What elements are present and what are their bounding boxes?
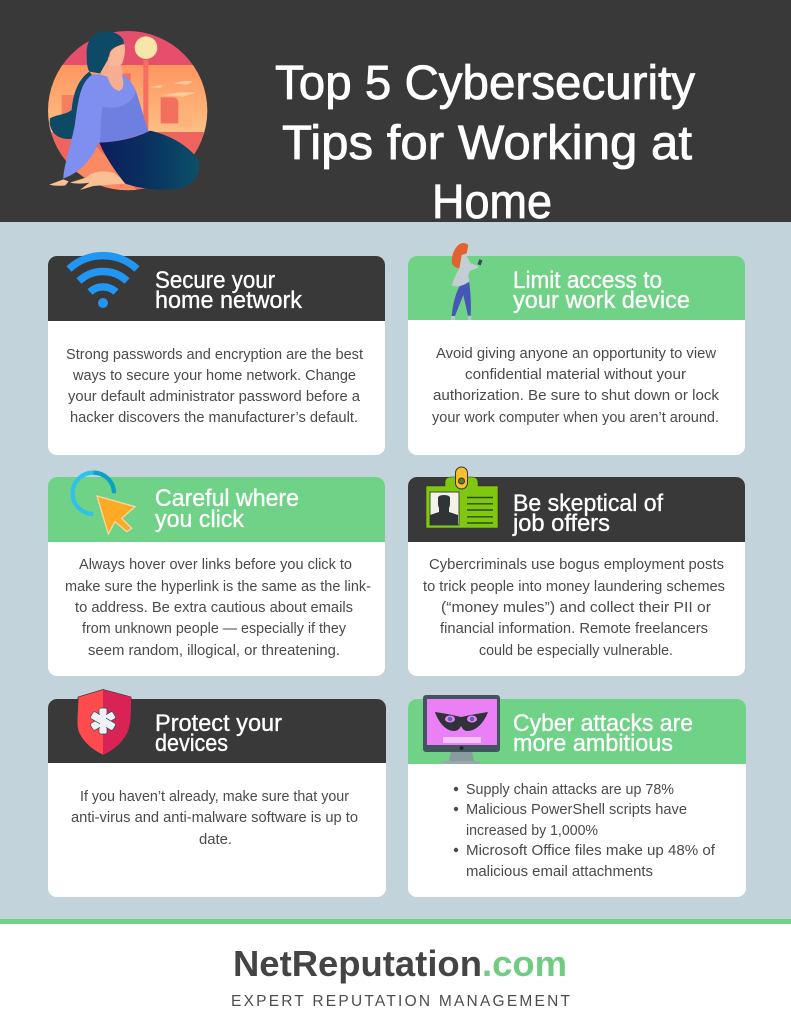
body text: could be especially vulnerable. [479,643,673,659]
heading: Protect your [155,710,282,737]
panel: limit access to your work device [408,243,745,455]
panel: protect your devices [48,690,386,897]
skirt [99,131,199,190]
body text: confidential material without your [465,367,686,383]
body text [432,346,720,426]
title: Home [432,176,552,229]
heading: Careful where [155,485,299,512]
body text: your work computer when you aren’t around. [432,410,719,426]
hands and feet [49,171,128,190]
logo: NetReputation.com [233,943,567,984]
icon: cursor with loading ring [73,473,135,534]
body text: Strong passwords and encryption are the best [66,347,363,363]
heading [513,710,693,757]
body text: date. [199,832,232,848]
panel: secure your home network [48,256,385,455]
heading [513,267,690,314]
body text: anti-virus and anti-malware software is up to [71,810,358,826]
title [275,57,695,229]
bullet list: malicious email attachments [466,864,653,880]
title: Top 5 Cybersecurity [275,57,695,110]
body text: financial information. Remote freelancers [440,621,708,637]
bullet list: Malicious PowerShell scripts have [466,802,687,818]
ponytail [50,72,93,139]
bullet list: Microsoft Office files make up 48% of [466,843,716,859]
neck and chest [102,57,124,91]
heading [155,485,299,533]
body text: make sure the hyperlink is the same as the link- [65,579,371,595]
footer [0,919,791,1024]
illustration: woman sitting by window [43,30,213,192]
sun [135,36,157,59]
heading: Be skeptical of [513,490,663,517]
body text: from unknown people — especially if they [82,621,347,637]
body text: Avoid giving anyone an opportunity to view [436,346,717,362]
body text: hacker discovers the manufacturer’s default. [70,410,358,426]
bullet list: Supply chain attacks are up 78% [466,782,674,798]
heading: job offers [512,510,610,537]
body text: to address. Be extra cautious about emails [75,600,353,616]
heading: your work device [513,287,690,314]
header band [0,0,791,229]
icon: shield [77,690,131,755]
heading [512,490,663,537]
body text [423,557,725,659]
heading [155,267,303,314]
body text: (“money mules”) and collect their PII or [441,600,711,616]
heading: Secure your [155,267,275,294]
body text: Cybercriminals use bogus employment posts [429,557,724,573]
sweater [63,74,148,178]
panel: cyber attacks are more ambitious [408,695,746,897]
icon: wifi [69,256,137,308]
body text [65,557,371,659]
icon: id badge [426,467,498,528]
body text: If you haven’t already, make sure that your [80,789,349,805]
heading: devices [155,730,228,757]
title: Tips for Working at [282,117,692,170]
panel: be skeptical of job offers [408,467,745,676]
hair [87,31,124,73]
heading: Limit access to [513,267,662,294]
bullet list: increased by 1,000% [466,823,598,839]
body text: seem random, illogical, or threatening. [88,643,340,659]
tagline: EXPERT REPUTATION MANAGEMENT [231,993,571,1010]
heading [155,710,282,757]
bullet list [454,782,716,880]
panel: careful where you click [48,473,385,676]
body text: authorization. Be sure to shut down or lock [433,388,720,404]
icon: monitor with masked face [423,695,500,764]
face [109,44,125,67]
heading: you click [155,506,245,533]
body text: Always hover over links before you click to [79,557,352,573]
body text [66,347,363,426]
heading: more ambitious [513,730,673,757]
heading: home network [155,287,303,314]
body text: to trick people into money laundering schemes [423,579,725,595]
body text: ways to secure your home network. Change [72,368,356,384]
body text: your default administrator password before a [68,389,361,405]
body text [71,789,358,848]
heading: Cyber attacks are [513,710,693,737]
icon: woman with phone [451,243,482,320]
